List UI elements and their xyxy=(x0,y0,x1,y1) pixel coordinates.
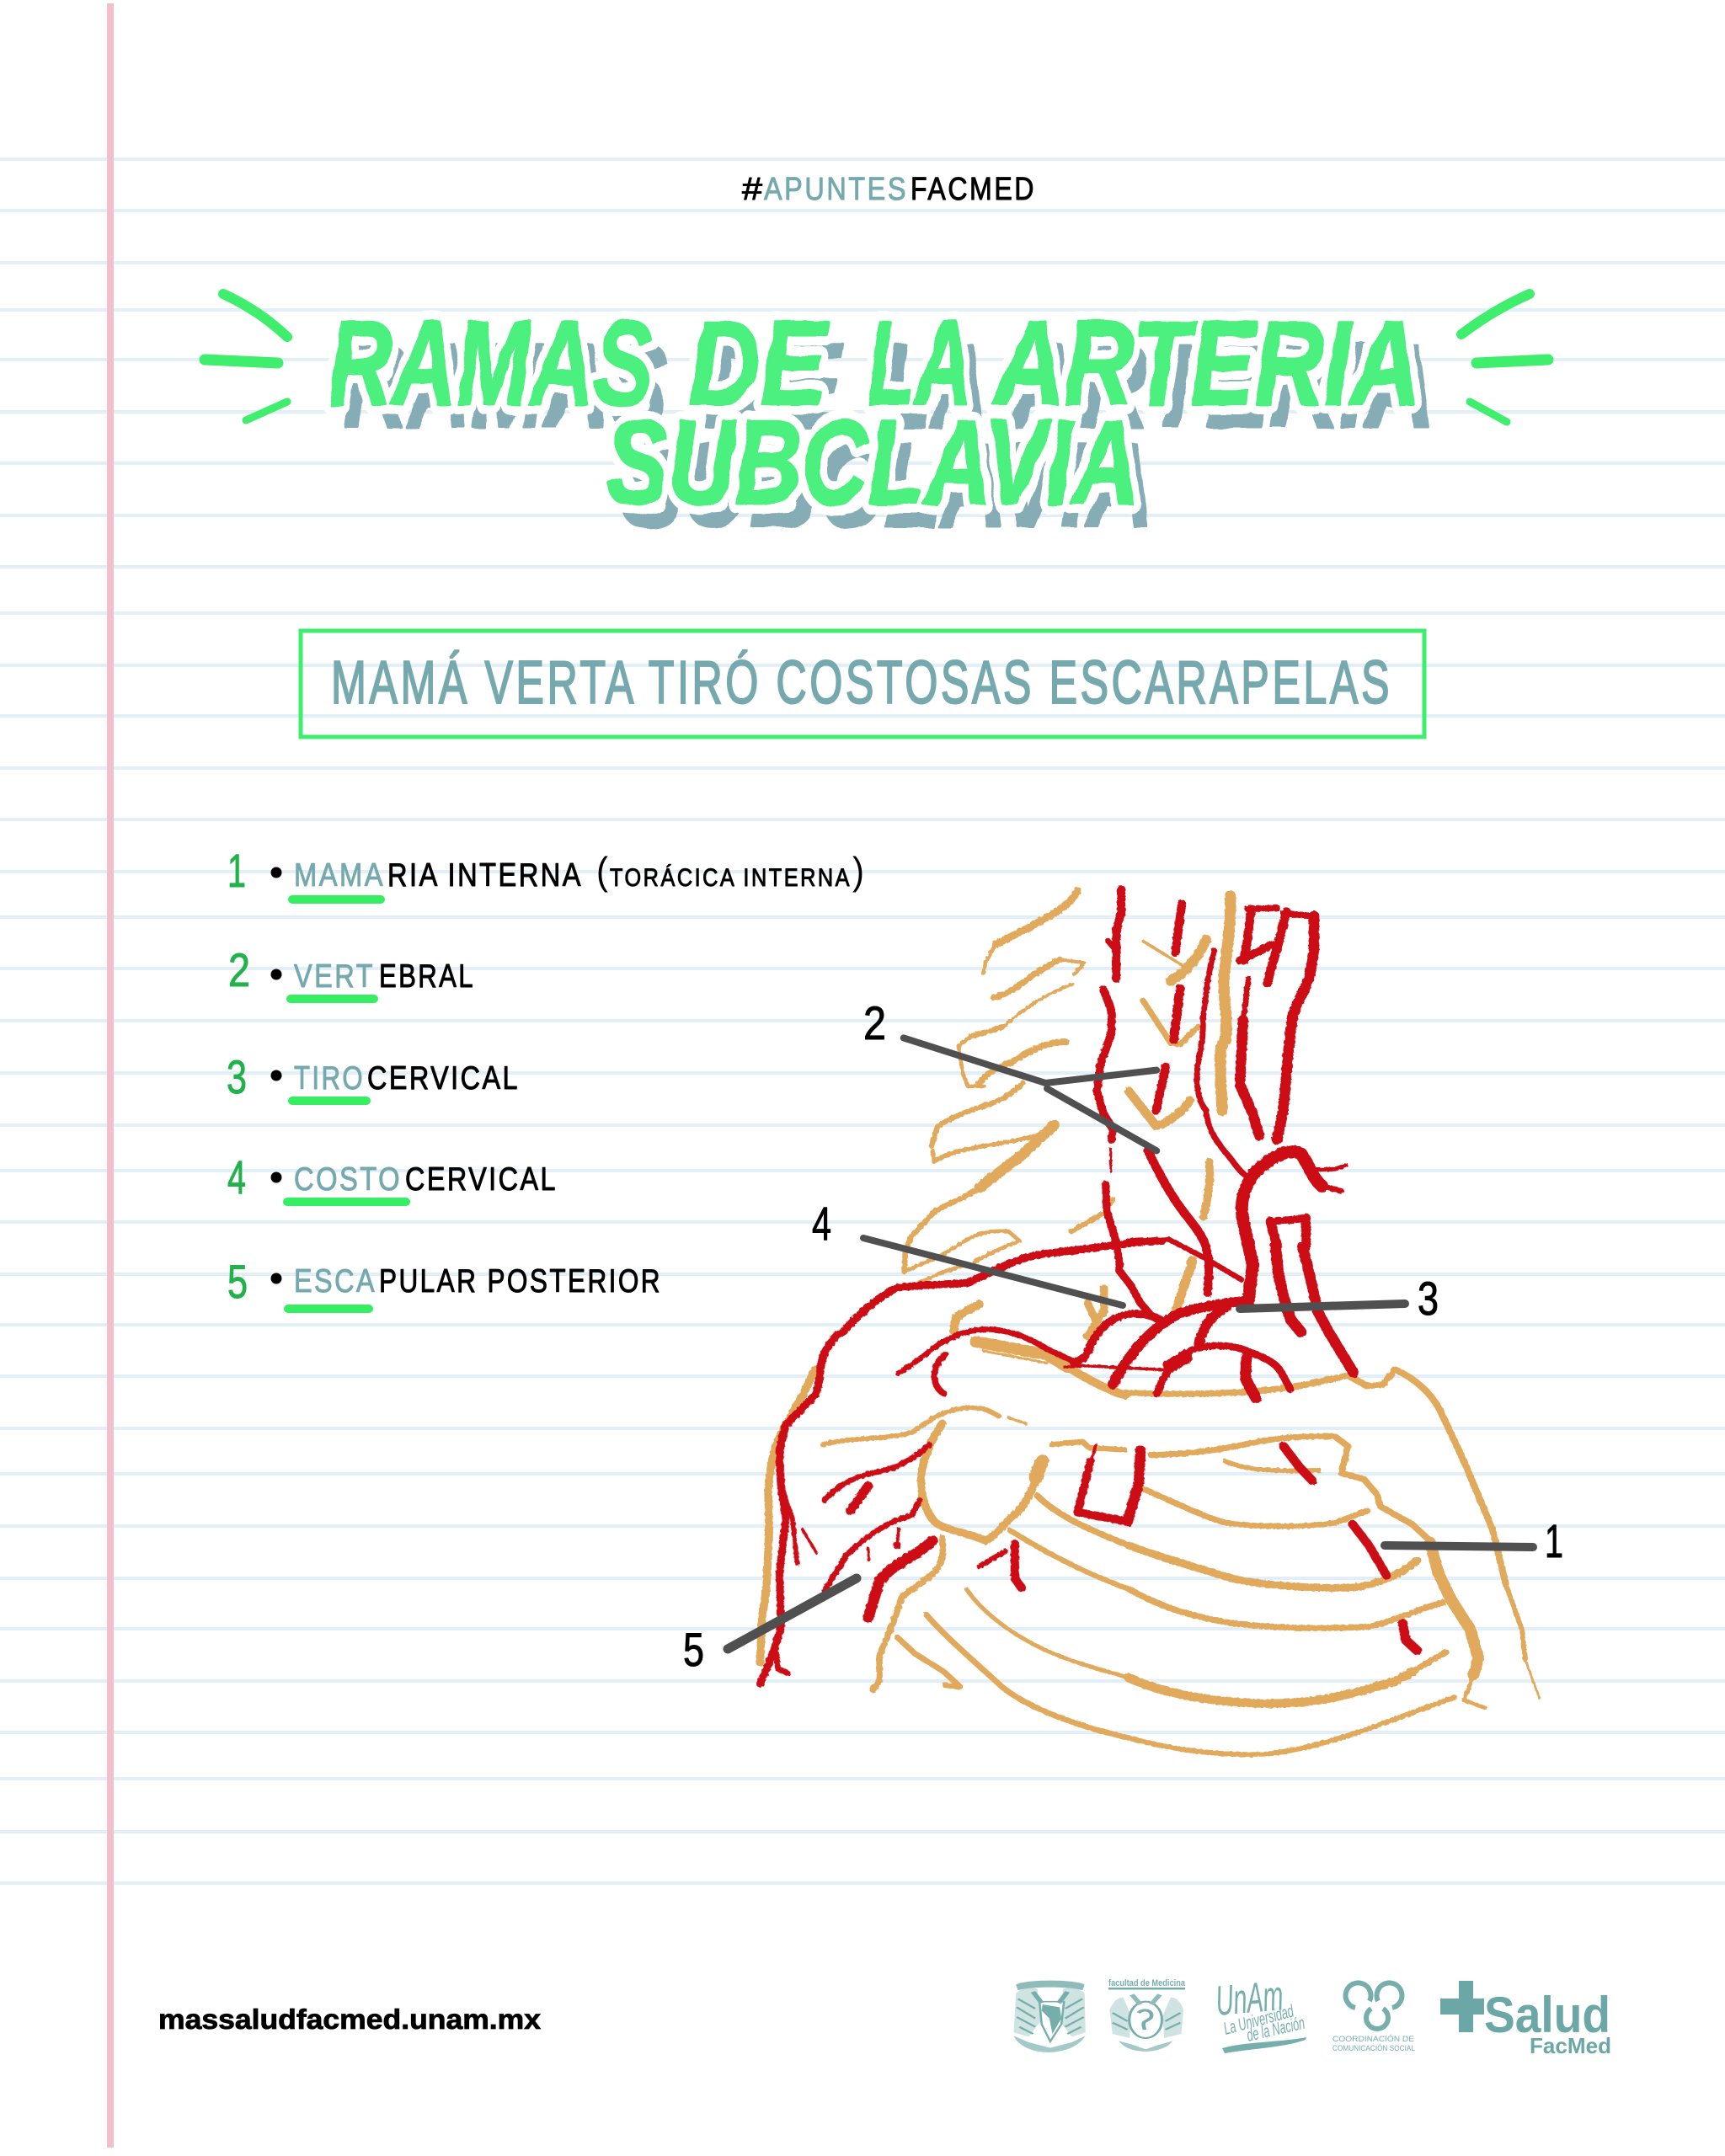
trachea and larynx cartilage xyxy=(1129,896,1231,1217)
diagram numbers xyxy=(683,996,1563,1676)
logo: UNAM La Universidad de la Nación xyxy=(1214,1972,1306,2053)
logo: UNAM La Universidad de la Nación: UnAm xyxy=(1214,1972,1285,2025)
title green text: ARTERIA xyxy=(993,296,1420,430)
list row 3: CERVICAL xyxy=(367,1060,520,1097)
list row 3: TIRO xyxy=(294,1060,365,1097)
notebook pink margin line xyxy=(107,3,114,2148)
list row 2: VERT xyxy=(294,958,375,995)
list row 3: 3 xyxy=(227,1050,247,1103)
anatomical diagram xyxy=(728,889,1540,1754)
title shadow xyxy=(344,319,1435,552)
title green text: SUBCLAVIA xyxy=(606,396,1139,530)
list row 5: 5 xyxy=(227,1255,248,1308)
first rib and central cartilage xyxy=(953,1261,1193,1396)
leader line 2 xyxy=(904,1038,1156,1150)
logo: Facultad de Medicina: facultad de Medicina xyxy=(1108,1978,1186,1988)
logo: Coordinación de Comunicación Social: COMUNICACIÓN SOCIAL xyxy=(1332,2044,1415,2053)
logo: UNAM La Universidad de la Nación: La Universidad xyxy=(1221,2001,1296,2039)
list row 4 xyxy=(227,1150,558,1203)
logo: +Salud FacMed: Salud xyxy=(1484,1987,1610,2043)
list row 5: PULAR POSTERIOR xyxy=(379,1263,662,1299)
logos xyxy=(1014,1972,1611,2058)
swoosh xyxy=(1222,2037,1306,2053)
list row 2: 2 xyxy=(228,943,250,996)
logo: UNAM shield xyxy=(1014,1981,1086,2052)
bones and cartilage xyxy=(760,891,1540,1754)
list row 5: ESCA xyxy=(294,1263,377,1299)
list row 4: COSTO xyxy=(294,1161,402,1198)
list row 1: TORÁCICA INTERNA xyxy=(610,864,852,892)
cervical vertebrae xyxy=(905,891,1114,1284)
leader line 5 xyxy=(728,1578,857,1649)
logo: UNAM La Universidad de la Nación: de la Nación xyxy=(1245,2014,1306,2046)
hashtag heading: APUNTES xyxy=(764,172,908,207)
internal thoracic artery segments xyxy=(1284,1446,1418,1651)
list row 2 xyxy=(228,943,475,999)
shoulder arteries xyxy=(760,1335,1140,1684)
mnemonic box xyxy=(301,631,1424,737)
number 4: 4 xyxy=(812,1197,831,1250)
number 3: 3 xyxy=(1418,1272,1439,1325)
leader line 3 xyxy=(1240,1304,1405,1309)
list row 3 xyxy=(227,1050,520,1103)
title white outline: LA xyxy=(868,296,972,430)
list row 1: MAMA xyxy=(294,857,385,894)
list row 1: 1 xyxy=(227,844,246,897)
number 1: 1 xyxy=(1545,1514,1563,1567)
hashtag heading: # xyxy=(742,172,762,207)
arteries xyxy=(760,889,1418,1684)
list row 1: RIA INTERNA xyxy=(387,857,583,894)
list row 1: ) xyxy=(852,849,864,893)
title white outline: SUBCLAVIA xyxy=(606,396,1139,530)
website url: massaludfacmed.unam.mx xyxy=(158,2004,542,2035)
title green text: RAMAS xyxy=(328,296,653,430)
list row 5 xyxy=(227,1255,662,1309)
title xyxy=(328,296,1435,552)
leader line 1 xyxy=(1385,1545,1533,1547)
title shadow: DE xyxy=(704,319,845,453)
title green text: DE xyxy=(689,296,830,430)
title burst strokes xyxy=(205,294,1548,422)
title white outline: RAMAS xyxy=(328,296,653,430)
title white outline: ARTERIA xyxy=(993,296,1420,430)
logo: Coordinación de Comunicación Social: COORDINACIÓN DE xyxy=(1332,2035,1414,2044)
hashtag heading xyxy=(742,172,1036,207)
title shadow: RAMAS xyxy=(344,319,668,453)
scapula and left ribs xyxy=(760,1369,1162,1738)
logo: +Salud FacMed xyxy=(1440,1981,1611,2058)
logo: Coordinación de Comunicación Social xyxy=(1332,1983,1415,2053)
hashtag heading: FACMED xyxy=(911,172,1036,207)
title green text xyxy=(328,296,1420,530)
leader lines xyxy=(728,1038,1533,1649)
list row 2: EBRAL xyxy=(379,958,475,995)
number 5: 5 xyxy=(683,1623,704,1676)
right ribs and shoulder outline xyxy=(1122,1369,1540,1754)
title shadow: LA xyxy=(883,319,987,453)
notebook ruled lines xyxy=(0,159,1725,1883)
list row 4: CERVICAL xyxy=(405,1161,558,1198)
eagle crest xyxy=(1109,1994,1183,2052)
subclavian branches at the first rib xyxy=(942,1246,1354,1398)
title white outline: DE xyxy=(689,296,830,430)
title white outline xyxy=(328,296,1420,530)
vertebral artery and subclavian trunk left xyxy=(842,889,1162,1333)
list of branches xyxy=(227,844,864,1309)
list row 4: 4 xyxy=(227,1150,246,1203)
title shadow: SUBCLAVIA xyxy=(622,419,1154,552)
title shadow: ARTERIA xyxy=(1008,319,1435,453)
title green text: LA xyxy=(868,296,972,430)
logo: Facultad de Medicina xyxy=(1108,1978,1186,2052)
logo: +Salud FacMed: FacMed xyxy=(1530,2033,1611,2058)
number 2: 2 xyxy=(863,996,886,1049)
list row 1 xyxy=(227,844,864,899)
carotid arteries and aortic arch xyxy=(1129,905,1346,1304)
list row 1: ( xyxy=(596,849,609,893)
leader line 4 xyxy=(863,1238,1123,1305)
